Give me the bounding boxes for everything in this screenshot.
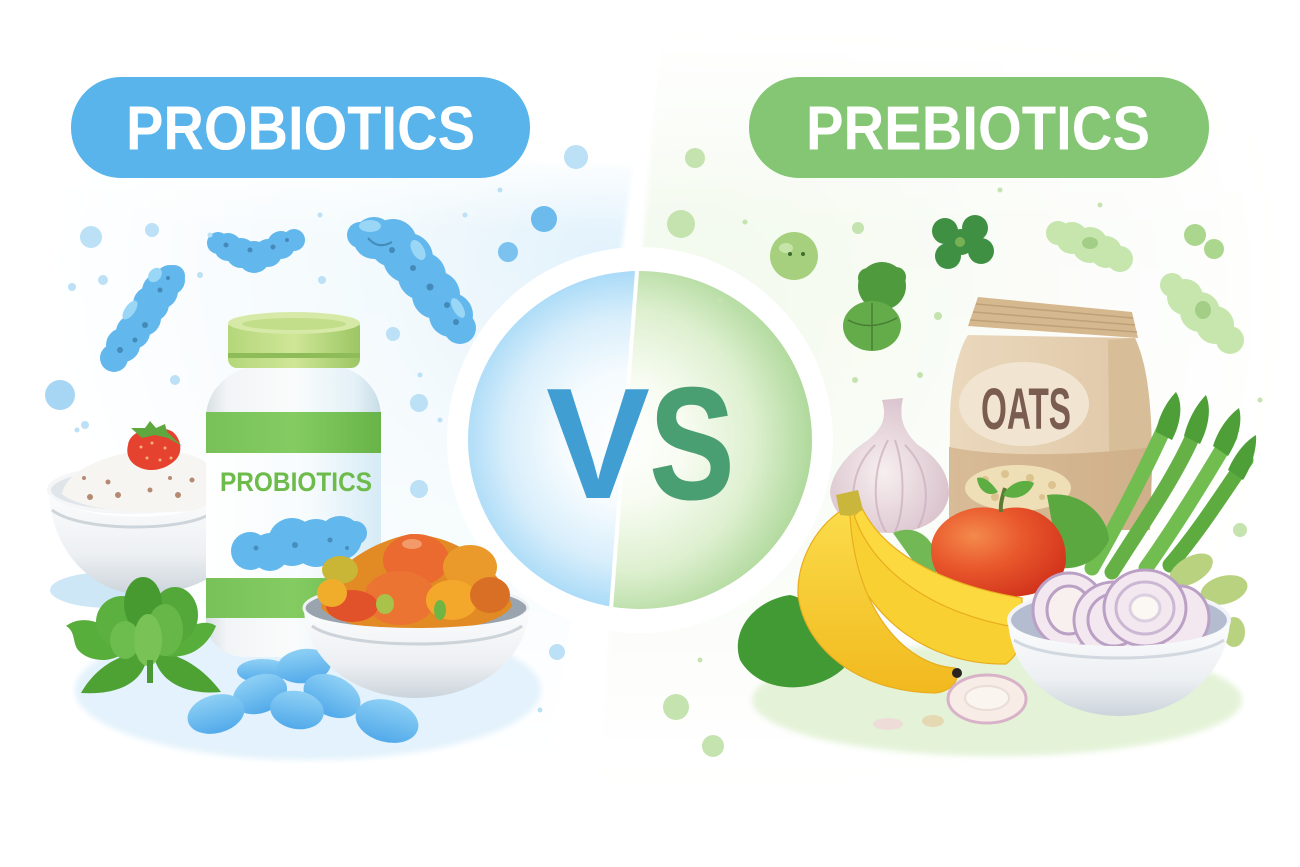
bag top fold [968, 297, 1138, 338]
onion slice [948, 675, 1026, 723]
strawberry [127, 421, 182, 470]
bananas [798, 490, 1022, 693]
dark green clover [932, 215, 994, 269]
banana: upper [850, 508, 1022, 640]
pale green bacterium: top [1046, 221, 1133, 272]
circle halo [447, 247, 833, 633]
background wash: probiotics side [268, 179, 628, 510]
background wash: prebiotics side [642, 146, 973, 502]
green half [613, 271, 812, 609]
vegetable bowl front [304, 610, 529, 698]
heading pill: PROBIOTICS: PROBIOTICS [126, 94, 475, 164]
onion bowl [1008, 570, 1230, 716]
bottle label [206, 450, 381, 580]
bottle label text: PROBIOTICS [220, 467, 372, 497]
banana: middle [838, 508, 1021, 664]
oat flakes [965, 465, 1071, 511]
onion bowl front [1008, 622, 1230, 716]
bottle lower band [206, 578, 381, 618]
fermented vegetable bowl [304, 534, 529, 698]
asparagus tips [1156, 392, 1256, 480]
spinach leaf [738, 595, 844, 687]
apple [931, 478, 1066, 597]
oats bag label: OATS [981, 377, 1071, 442]
pale green bacterium: pea [770, 232, 818, 280]
asparagus [1092, 392, 1256, 572]
small food scraps [873, 715, 944, 730]
blue bacterium: left rod [100, 265, 185, 372]
blue half [468, 271, 635, 606]
onion rings [1033, 570, 1209, 658]
letter V: V [546, 356, 650, 532]
fermented vegetables [317, 534, 512, 632]
ground ellipse: probiotics [75, 620, 541, 760]
bottle cap [228, 312, 360, 368]
oats bag [949, 297, 1152, 530]
bottle label bacterium [231, 516, 367, 571]
yogurt bowl front [49, 494, 214, 594]
green leaves behind fruit [738, 494, 1109, 687]
basil leaves [66, 577, 221, 693]
green sprouts [843, 262, 906, 351]
heading pill: PREBIOTICS: PREBIOTICS [806, 94, 1150, 164]
banana stem [836, 490, 863, 516]
heading pill: PREBIOTICS [749, 77, 1209, 178]
green particles [663, 148, 1262, 757]
ground ellipse: prebiotics [752, 644, 1242, 756]
letter S: S [650, 356, 734, 532]
bottle top band [206, 412, 381, 453]
VS circle [447, 247, 833, 633]
green pair [1184, 224, 1224, 259]
heading pill: PROBIOTICS [71, 77, 530, 178]
probiotics bottle [206, 312, 381, 657]
blue particles [45, 145, 588, 712]
pale green bacterium: right [1160, 273, 1244, 354]
yogurt bowl [49, 421, 214, 608]
yogurt cream [62, 450, 212, 512]
blue bacterium: top arc [207, 229, 305, 273]
garlic [830, 398, 949, 533]
pale green vegetable pieces [1164, 547, 1251, 647]
banana: lower [798, 510, 957, 693]
blue capsules [183, 645, 423, 750]
blue bacterium: large rod [347, 217, 476, 344]
